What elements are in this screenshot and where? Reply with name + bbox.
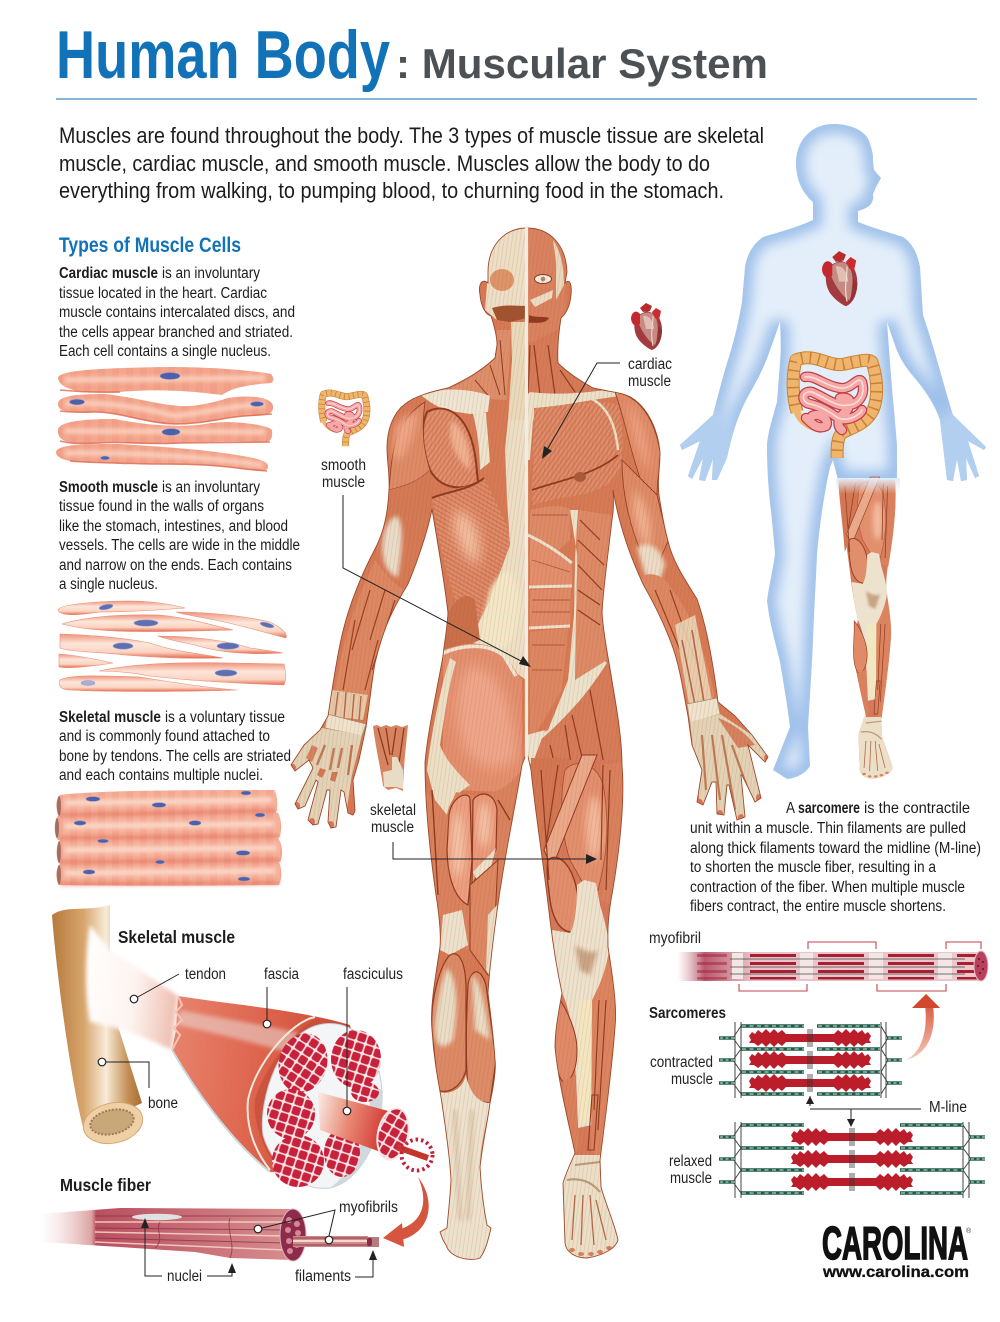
label: cardiac muscle with arrow: muscle [628, 373, 671, 390]
illustration: smooth muscle cells [58, 601, 286, 692]
callout: nuclei: nuclei [167, 1268, 202, 1285]
label: relaxed muscle [669, 1153, 712, 1187]
heading: types of muscle cells: Types of Muscle Cells [59, 234, 241, 257]
text: skeletal muscle [59, 709, 291, 784]
intro text: everything from walking, to pumping blood, to churning food in the stomach. [59, 178, 724, 203]
brackets: sarcomere ranges [739, 942, 981, 991]
text: skeletal muscle: is a voluntary tissue [165, 709, 285, 726]
diagram: contracted sarcomere [719, 1022, 902, 1098]
heading: muscle fiber: Muscle fiber [60, 1175, 151, 1195]
text: smooth muscle: like the stomach, intestines, and blood [59, 518, 288, 535]
label: contracted muscle [650, 1054, 713, 1088]
illustration: bone [52, 905, 147, 1149]
logo: Carolina: www.carolina.com [822, 1264, 969, 1281]
text: cardiac muscle: muscle contains intercalated discs, and [59, 304, 295, 321]
diagram: relaxed sarcomere [719, 1122, 985, 1198]
text: smooth muscle: tissue found in the walls of organs [59, 498, 264, 515]
intro text [59, 123, 764, 203]
label: cardiac muscle with arrow: cardiac [628, 356, 672, 373]
text: smooth muscle: is an involuntary [162, 479, 260, 496]
callout: myofibrils: myofibrils [339, 1199, 398, 1216]
text: sarcomere description: fibers contract, the entire muscle shortens. [690, 898, 946, 915]
illustration: muscle cross section [262, 1024, 382, 1188]
label: smooth muscle with arrow: smooth [321, 457, 366, 474]
figure: main muscular body [280, 220, 780, 1270]
callout: fasciculus: fasciculus [343, 966, 403, 983]
label: relaxed muscle: muscle [670, 1170, 712, 1187]
label: M-line with arrows: M-line [929, 1099, 967, 1116]
text: smooth muscle: Smooth muscle [59, 479, 158, 496]
text: cardiac muscle: Each cell contains a single nucleus. [59, 343, 271, 360]
panel: muscle fiber diagram [40, 1175, 398, 1285]
illustration: fiber bundle [40, 1208, 379, 1261]
text: skeletal muscle: and each contains multiple nuclei. [59, 767, 263, 784]
callout: bone: bone [148, 1095, 178, 1112]
label: myofibril: myofibril [649, 930, 701, 947]
icon: heart in silhouette [822, 251, 857, 306]
text: smooth muscle: and narrow on the ends. Each contains [59, 557, 292, 574]
label: skeletal muscle with arrow: skeletal [370, 802, 416, 819]
text: skeletal muscle: Skeletal muscle [59, 709, 161, 726]
right half: front view details [527, 228, 770, 822]
icon: intestines [322, 393, 367, 446]
text: cardiac muscle: the cells appear branched and striated. [59, 324, 293, 341]
text: sarcomere description: to shorten the muscle fiber, resulting in a [690, 859, 936, 876]
illustration: myofibril tube [677, 951, 988, 981]
illustration: fascicle [318, 1092, 432, 1170]
icon: leg muscles in silhouette [836, 477, 900, 779]
left half: back view details [290, 228, 527, 1259]
text: cardiac muscle [59, 265, 295, 360]
arrow: fascicle to fiber [383, 1177, 429, 1247]
label: smooth muscle with arrow [321, 457, 531, 667]
text: cardiac muscle: is an involuntary [162, 265, 260, 282]
callout: fascia [263, 966, 299, 1028]
title [56, 17, 768, 93]
text: skeletal muscle: bone by tendons. The cells are striated [59, 748, 291, 765]
text: smooth muscle: a single nucleus. [59, 576, 158, 593]
icon: intestines in silhouette [793, 358, 877, 458]
heading: sarcomeres: Sarcomeres [649, 1005, 726, 1022]
label: skeletal muscle with arrow: muscle [371, 819, 414, 836]
icon: skeletal muscle sample [373, 725, 408, 791]
callout: tendon: tendon [185, 966, 226, 983]
illustration: muscle bundle with tendon [86, 925, 368, 1175]
text: smooth muscle: vessels. The cells are wide in the middle [59, 537, 300, 554]
label: cardiac muscle with arrow [542, 356, 672, 459]
panel: skeletal muscle diagram [52, 905, 432, 1247]
text: cardiac muscle: tissue located in the heart. Cardiac [59, 285, 267, 302]
callout: filaments [295, 1250, 377, 1285]
panel: myofibril [649, 930, 988, 991]
text: sarcomere description: is the contractile [864, 800, 970, 817]
text: sarcomere description: contraction of the fiber. When multiple muscle [690, 879, 965, 896]
title: : Muscular System [396, 40, 768, 87]
label: contracted muscle: contracted [650, 1054, 713, 1071]
intro text: Muscles are found throughout the body. The 3 types of muscle tissue are skeletal [59, 123, 764, 148]
label: smooth muscle with arrow: muscle [322, 474, 365, 491]
callout: tendon [130, 966, 226, 1003]
text: sarcomere description [690, 800, 981, 915]
label: skeletal muscle with arrow [370, 802, 597, 864]
body base [280, 220, 780, 1270]
label: contracted muscle: muscle [671, 1071, 713, 1088]
text: sarcomere description: A [786, 800, 796, 817]
callout: myofibrils [254, 1199, 398, 1244]
text: sarcomere description: unit within a muscle. Thin filaments are pulled [690, 820, 966, 837]
text: cardiac muscle: Cardiac muscle [59, 265, 158, 282]
intro text: muscle, cardiac muscle, and smooth muscle. Muscles allow the body to do [59, 151, 710, 176]
text: sarcomere description: sarcomere [798, 800, 860, 817]
logo: Carolina: ® [966, 1227, 972, 1235]
arrow: sarcomere to myofibril [906, 994, 940, 1060]
callout: bone [98, 1058, 178, 1112]
label: M-line with arrows [806, 1096, 967, 1127]
callout: fascia: fascia [264, 966, 299, 983]
illustration: skeletal muscle cells [55, 790, 282, 886]
title: Human Body [56, 17, 390, 93]
illustration: cardiac muscle cells [56, 367, 273, 471]
centre divider [525, 226, 528, 757]
panel: silhouette with organs [672, 124, 994, 779]
callout: nuclei [141, 1218, 236, 1285]
text: skeletal muscle: and is commonly found attached to [59, 728, 270, 745]
icon: heart [631, 303, 662, 350]
text: smooth muscle [59, 479, 300, 593]
callout: filaments: filaments [295, 1268, 351, 1285]
callout: fasciculus [343, 966, 403, 1115]
heading: skeletal muscle: Skeletal muscle [118, 927, 235, 947]
panel: sarcomeres [649, 1005, 985, 1198]
label: relaxed muscle: relaxed [669, 1153, 712, 1170]
